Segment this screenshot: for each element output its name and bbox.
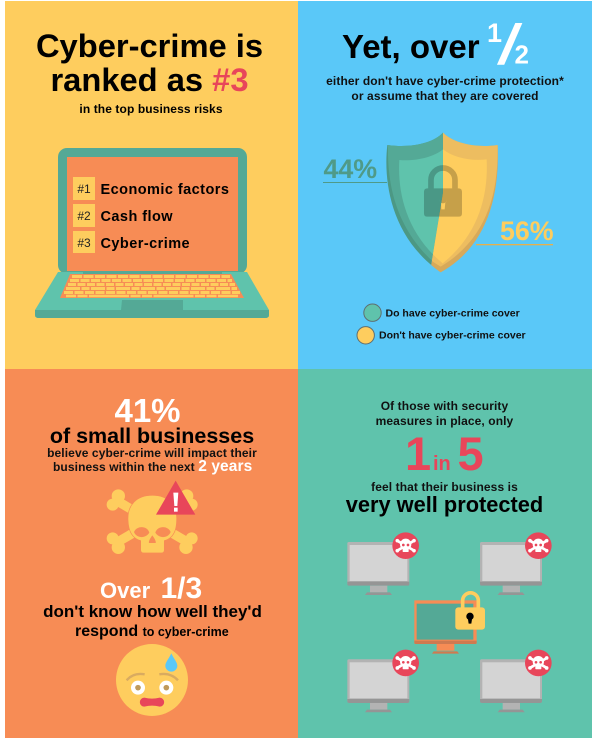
icon: warning triangle bbox=[156, 481, 195, 515]
icon: protected computer with padlock bbox=[414, 593, 485, 654]
text block: 1 in 5: Of those with security bbox=[381, 399, 509, 413]
text block: 1 in 5 bbox=[346, 399, 543, 517]
label: 44%: 44% bbox=[324, 154, 377, 184]
text block: 1 in 5: very well protected bbox=[346, 492, 543, 517]
label: 56% bbox=[476, 216, 554, 246]
text block: 1 in 5: 1 bbox=[405, 427, 431, 480]
text block: 1 in 5: feel that their business is bbox=[371, 480, 518, 494]
heading: yet over one half: either don't have cyber-crime protection* bbox=[326, 74, 564, 88]
risk row 3 bbox=[73, 231, 190, 253]
panel: orange background bbox=[5, 369, 298, 738]
right half of shield bbox=[431, 132, 498, 272]
text block: 1 in 5: measures in place, only bbox=[376, 414, 514, 428]
left half of shield bbox=[386, 132, 443, 265]
icon: infected computer bottom left bbox=[347, 650, 419, 712]
panel: blue background bbox=[298, 1, 592, 369]
text block: over 1/3: Over bbox=[100, 578, 151, 603]
label: 56%: 56% bbox=[500, 216, 554, 246]
text block: over 1/3: respond to cyber-crime bbox=[75, 623, 229, 640]
icon: padlock on shield bbox=[424, 168, 462, 217]
heading: cyber-crime ranked #3 bbox=[36, 27, 263, 116]
icon: laptop with risk list bbox=[35, 148, 269, 318]
panel: green background bbox=[298, 369, 592, 738]
risk row 2 bbox=[73, 204, 173, 227]
icon: infected computer top right bbox=[480, 532, 552, 595]
text block: 1 in 5: in bbox=[433, 453, 451, 475]
icon: infected computer top left bbox=[347, 532, 419, 595]
heading: yet over one half: 1 bbox=[487, 18, 502, 48]
text block: 41% of small businesses: of small businesses bbox=[50, 424, 254, 448]
text block: over 1/3 bbox=[43, 572, 262, 640]
risk row 1: #1 bbox=[77, 182, 91, 196]
legend: cyber-crime cover bbox=[357, 304, 526, 344]
risk row 3: #3 bbox=[77, 236, 91, 250]
heading: yet over one half: / bbox=[497, 13, 523, 77]
text block: over 1/3: don't know how well they'd bbox=[43, 602, 262, 621]
text block: 1 in 5: 5 bbox=[458, 427, 484, 480]
icon: worried face bbox=[116, 644, 188, 716]
panel: yellow background bbox=[5, 1, 298, 369]
heading: cyber-crime ranked #3: ranked as #3 bbox=[50, 61, 249, 98]
risk row 2: Cash flow bbox=[100, 209, 173, 225]
heading: yet over one half bbox=[326, 13, 564, 103]
icon: skull with warning triangle bbox=[107, 481, 198, 554]
risk row 2: #2 bbox=[77, 209, 91, 223]
risk row 3: Cyber-crime bbox=[100, 236, 190, 252]
text block: 41% of small businesses: 41% bbox=[114, 392, 181, 429]
heading: yet over one half: 2 bbox=[514, 40, 529, 70]
heading: yet over one half: Yet, over bbox=[342, 28, 480, 65]
legend: cyber-crime cover: Don't have cyber-crime cover bbox=[379, 330, 526, 342]
text block: over 1/3: 1/3 bbox=[160, 572, 202, 605]
text block: 41% of small businesses: believe cyber-crime will impact their bbox=[47, 446, 257, 460]
text block: 41% of small businesses bbox=[47, 392, 257, 475]
heading: cyber-crime ranked #3: in the top business risks bbox=[79, 102, 223, 116]
risk row 1: Economic factors bbox=[100, 182, 229, 198]
icon: infected computer bottom right bbox=[480, 650, 552, 712]
heading: yet over one half: or assume that they are covered bbox=[351, 89, 539, 103]
text block: 41% of small businesses: business within the next 2 years bbox=[53, 458, 252, 475]
heading: cyber-crime ranked #3: Cyber-crime is bbox=[36, 27, 263, 64]
legend: cyber-crime cover: Do have cyber-crime cover bbox=[386, 308, 520, 320]
risk row 1 bbox=[73, 177, 229, 200]
chart: shield split 44 / 56 bbox=[323, 133, 554, 272]
